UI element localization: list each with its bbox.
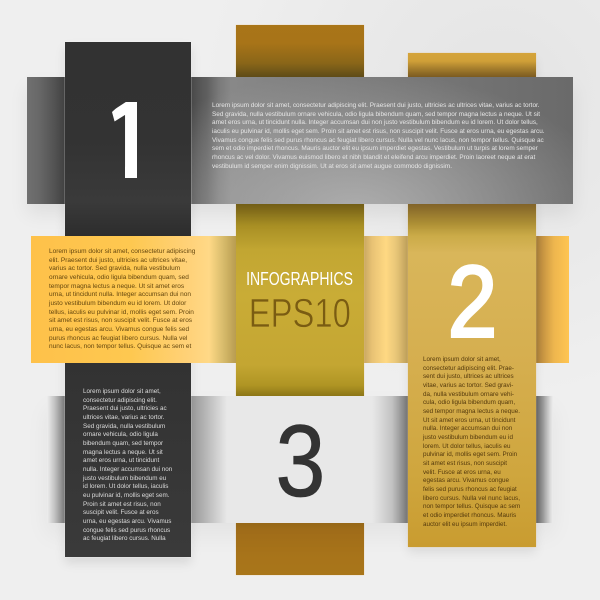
gold column text: sed tempor magna lectus a neque. — [423, 408, 520, 415]
dark column text: eu pulvinar id, mollis eget sem. — [83, 492, 169, 499]
number 2: 2 — [448, 246, 497, 359]
yellow band text — [48, 248, 195, 350]
gold column text: Ut sit amet eros urna, ut tincidunt — [423, 417, 515, 424]
dark column text: urna, eu egestas arcu. Vivamus — [83, 518, 171, 525]
gold column text: da, nulla vestibulum ornare vehi- — [423, 391, 514, 398]
dark column text: justo vestibulum bibendum eu — [83, 475, 166, 482]
gray band text — [212, 102, 545, 170]
gold column text: egestas arcu. Vivamus congue — [423, 477, 509, 484]
yellow band text: Lorem ipsum dolor sit amet, consectetur adipiscing — [49, 248, 195, 255]
center gold column — [236, 25, 364, 575]
title: INFOGRAPHICS: INFOGRAPHICS — [247, 269, 353, 289]
yellow band: middle and right segments — [236, 236, 569, 363]
dark column text: magna lectus a neque. Ut sit — [83, 449, 163, 456]
gold column text: lorem. Ut dolor tellus, iaculis eu — [423, 443, 510, 450]
gold column text: velit. Fusce at eros urna, eu — [423, 469, 501, 476]
gold column text: Lorem ipsum dolor sit amet, — [423, 356, 501, 363]
gray band text: iaculis eu pulvinar id, mollis eget sem. Proin sit amet est risus, non suscipit velit. Fusce at eros urna, eu egestas arcu. — [212, 128, 545, 135]
gray band text: rhoncus ac vel dolor. Vivamus euismod libero et nibh blandit et eleifend arcu imperdiet. Proin laoreet neque at erat — [212, 154, 535, 161]
dark column text — [82, 388, 172, 542]
dark column text: bibendum quam, sed tempor — [83, 440, 163, 447]
gold column text: non tempor tellus. Quisque ac sem — [423, 503, 520, 510]
gold column text: consectetur adipiscing elit. Prae- — [423, 365, 514, 372]
bottom white band — [47, 396, 553, 523]
gold column text — [422, 356, 520, 528]
yellow band text: sit amet est risus, non suscipit velit. Fusce at eros — [49, 317, 192, 324]
gold column text: pulvinar id, mollis eget sem. Proin — [423, 451, 517, 458]
yellow band text: purus rhoncus ac feugiat libero cursus. Nulla vel — [49, 335, 187, 342]
yellow band text: varius ac tortor. Sed gravida, nulla vestibulum — [49, 265, 180, 272]
dark column text: suscipit velit. Fusce at eros — [83, 509, 159, 516]
yellow band text: nunc lacus, non tempor tellus. Quisque ac sem et — [49, 343, 191, 350]
gold column text: auctor elit eu ipsum imperdiet. — [423, 521, 507, 528]
gold column text: cula, odio ligula bibendum quam, — [423, 399, 515, 406]
yellow band text: tellus, iaculis eu pulvinar id, mollis eget sem. Proin — [49, 309, 194, 316]
gold column text: felis sed purus rhoncus ac feugiat — [423, 486, 517, 493]
dark column text: congue felis sed purus rhoncus — [83, 527, 170, 534]
dark column text: ornare vehicula, odio ligula — [83, 431, 158, 438]
dark column text: nulla. Integer accumsan dui non — [83, 466, 172, 473]
dark column text: Sed gravida, nulla vestibulum — [83, 423, 165, 430]
dark column text: Lorem ipsum dolor sit amet, — [83, 388, 161, 395]
gray band text: Vivamus congue felis sed purus rhoncus ac feugiat libero cursus. Nulla vel nunc lacus, non tempor tellus. Quisque ac — [212, 137, 544, 144]
yellow band text: tempor magna lectus a neque. Ut sit amet eros — [49, 283, 184, 290]
gold column text: sit amet est risus, non suscipit — [423, 460, 507, 467]
dark column text: ac feugiat libero cursus. Nulla — [83, 535, 166, 542]
dark column text: id lorem. Ut dolor tellus, iaculis — [83, 483, 168, 490]
number 3: 3 — [276, 405, 325, 518]
dark column text: Praesent dui justo, ultricies ac — [83, 405, 167, 412]
gold column text: nulla. Integer accumsan dui non — [423, 425, 512, 432]
yellow band text: urna, ut tincidunt nulla. Integer accumsan dui non — [49, 291, 191, 298]
right gold column with number 2 and text — [408, 53, 536, 547]
gray band text: sem et odio imperdiet rhoncus. Mauris auctor elit eu ipsum imperdiet egestas. Vestibulum ut turpis at lorem semper — [212, 145, 538, 152]
gold column text: et odio imperdiet rhoncus. Mauris — [423, 512, 516, 519]
gold column text: vitae, varius ac tortor. Sed gravi- — [423, 382, 513, 389]
yellow band text: justo vestibulum bibendum eu id lorem. Ut dolor — [49, 300, 186, 307]
dark column text: consectetur adipiscing elit. — [83, 397, 157, 404]
dark column text: amet eros urna, ut tincidunt — [83, 457, 159, 464]
yellow band text: ornare vehicula, odio ligula bibendum quam, sed — [49, 274, 189, 281]
gold column text: justo vestibulum bibendum eu id — [423, 434, 513, 441]
number 1: 1 — [99, 79, 161, 202]
yellow band text: elit. Praesent dui justo, ultricies ac ultrices vitae, — [49, 257, 187, 264]
gray band text: Sed gravida, nulla vestibulum ornare vehicula, odio ligula bibendum quam, sed tempor magna lectus a neque. Ut sit — [212, 111, 540, 118]
yellow band: left segment with text — [31, 236, 236, 363]
gold column text: sent dui justo, ultrices ac ultrices — [423, 373, 514, 380]
dark column text: Proin sit amet est risus, non — [83, 501, 161, 508]
dark column with number 1 and text — [65, 42, 191, 557]
subtitle: EPS10: EPS10 — [249, 290, 351, 336]
gray band with text — [27, 77, 573, 204]
yellow band text: urna, eu egestas arcu. Vivamus congue felis sed — [49, 326, 189, 333]
gray band text: Lorem ipsum dolor sit amet, consectetur adipiscing elit. Praesent dui justo, ultricies ac ultrices vitae, varius ac tortor. — [212, 102, 540, 109]
gray band text: vestibulum id semper enim dignissim. Ut at eros sit amet augue commodo dignissim. — [212, 163, 452, 170]
gray band text: amet eros urna, ut tincidunt nulla. Integer accumsan dui non justo vestibulum bibendum eu id lorem. Ut dolor tellus, — [212, 119, 538, 126]
dark column text: ultrices vitae, varius ac tortor. — [83, 414, 165, 421]
gold column text: libero cursus. Nulla vel nunc lacus, — [423, 495, 520, 502]
